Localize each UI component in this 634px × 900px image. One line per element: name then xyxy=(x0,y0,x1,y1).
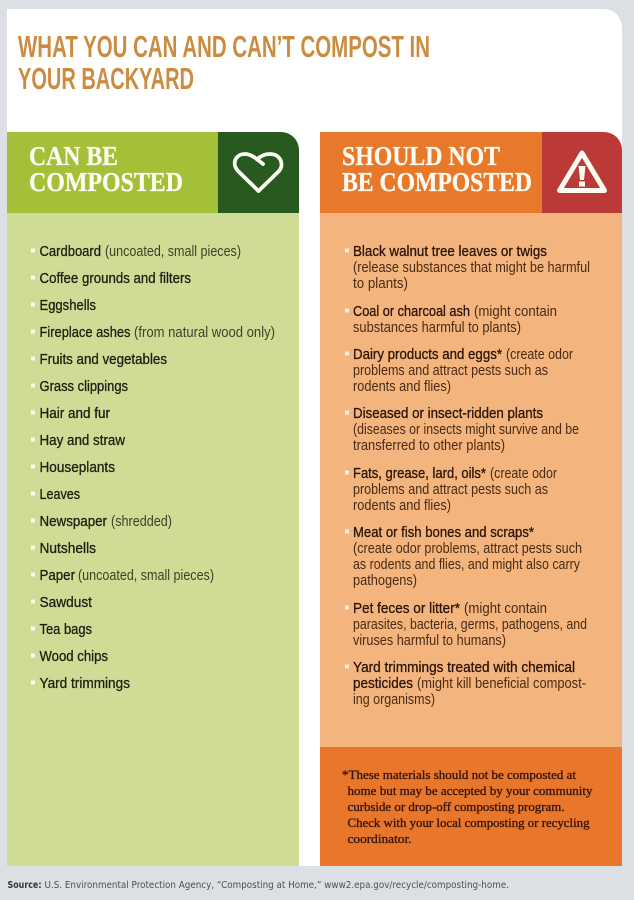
list: items not to compost: Yard trimmings treated with chemical xyxy=(353,659,575,676)
list: compostable items: Fireplace ashes xyxy=(40,324,130,341)
list: compostable items: Wood chips xyxy=(40,648,108,665)
list: compostable items: Tea bags xyxy=(40,621,92,638)
list: items not to compost: to plants) xyxy=(353,275,408,292)
list: items not to compost: (might contain xyxy=(474,303,557,320)
list: compostable items: Nutshells xyxy=(40,540,96,557)
title: YOUR BACKYARD xyxy=(18,61,194,96)
list: items not to compost: transferred to other plants) xyxy=(353,437,505,454)
list: items not to compost: (create odor xyxy=(506,346,573,363)
list: items not to compost: Pet feces or litter* xyxy=(353,600,460,617)
list: items not to compost: parasites, bacteria, germs, pathogens, and xyxy=(353,616,587,633)
list: compostable items: Houseplants xyxy=(40,459,115,476)
list: items not to compost: (diseases or insects might survive and be xyxy=(353,421,579,438)
list: items not to compost: rodents and flies) xyxy=(353,378,451,395)
list: items not to compost: viruses harmful to humans) xyxy=(353,632,506,649)
list: compostable items: Hay and straw xyxy=(40,432,125,449)
callout: footnote: *These materials should not be composted at xyxy=(342,768,577,782)
icon: warning triangle xyxy=(542,132,622,213)
list: items not to compost: (create odor xyxy=(490,465,557,482)
panel body: pale green xyxy=(7,213,299,866)
callout: footnote xyxy=(320,747,622,866)
list: compostable items: (from natural wood only) xyxy=(134,324,275,341)
list: compostable items: Eggshells xyxy=(40,297,96,314)
heading: should not be composted xyxy=(320,132,542,213)
title: WHAT YOU CAN AND CAN’T COMPOST IN xyxy=(18,29,430,64)
callout: footnote: curbside or drop-off composting program. xyxy=(348,800,564,814)
list: items not to compost: Fats, grease, lard, oils* xyxy=(353,465,486,482)
callout: footnote: coordinator. xyxy=(348,832,412,846)
list: compostable items: Hair and fur xyxy=(40,405,110,422)
list: compostable items: (uncoated, small pieces) xyxy=(105,243,241,260)
list: compostable items xyxy=(31,243,275,692)
callout: footnote: Check with your local composting or recycling xyxy=(348,816,590,830)
list: items not to compost: substances harmful to plants) xyxy=(353,319,521,336)
list: items not to compost: as rodents and flies, and might also carry xyxy=(353,556,580,573)
list: compostable items: Cardboard xyxy=(40,243,101,260)
list: compostable items: Yard trimmings xyxy=(40,675,130,692)
heading: can be composted xyxy=(7,132,218,213)
heading: should not be composted: BE COMPOSTED xyxy=(342,167,532,197)
list: items not to compost: pathogens) xyxy=(353,572,417,589)
list: compostable items: Coffee grounds and filters xyxy=(40,270,191,287)
list: compostable items: (uncoated, small pieces) xyxy=(78,567,214,584)
panel: can be composted xyxy=(7,132,299,866)
list: items not to compost: (release substances that might be harmful xyxy=(353,259,590,276)
heading: can be composted: COMPOSTED xyxy=(29,167,183,197)
list: compostable items: Grass clippings xyxy=(40,378,128,395)
panel body: pale orange xyxy=(320,213,622,747)
list: compostable items: (shredded) xyxy=(111,513,172,530)
list: items not to compost xyxy=(345,243,590,708)
list: items not to compost: problems and attract pests such as xyxy=(353,362,548,379)
list: items not to compost: Black walnut tree leaves or twigs xyxy=(353,243,547,260)
heading: should not be composted: SHOULD NOT xyxy=(342,141,500,171)
icon: heart xyxy=(218,132,299,213)
list: items not to compost: (might contain xyxy=(464,600,547,617)
list: items not to compost: Coal or charcoal ash xyxy=(353,303,470,320)
list: items not to compost: ing organisms) xyxy=(353,691,435,708)
list: items not to compost: problems and attract pests such as xyxy=(353,481,548,498)
list: items not to compost: (create odor problems, attract pests such xyxy=(353,540,582,557)
title xyxy=(18,29,430,96)
list: compostable items: Leaves xyxy=(40,486,80,503)
list: compostable items: Paper xyxy=(40,567,75,584)
list: items not to compost: Meat or fish bones and scraps* xyxy=(353,524,534,541)
source line: Source: xyxy=(8,880,42,891)
list: items not to compost: Dairy products and eggs* xyxy=(353,346,502,363)
list: items not to compost: rodents and flies) xyxy=(353,497,451,514)
panel: should not be composted xyxy=(320,132,622,866)
list: items not to compost: (might kill beneficial compost- xyxy=(417,675,586,692)
callout: footnote: home but may be accepted by your community xyxy=(348,784,593,798)
list: compostable items: Fruits and vegetables xyxy=(40,351,167,368)
list: compostable items: Sawdust xyxy=(40,594,93,611)
list: items not to compost: Diseased or insect-ridden plants xyxy=(353,405,543,422)
list: compostable items: Newspaper xyxy=(40,513,107,530)
list: items not to compost: pesticides xyxy=(353,675,413,692)
source line: U.S. Environmental Protection Agency, “Composting at Home,” www2.epa.gov/recycle/composting-home. xyxy=(44,880,509,891)
heading: can be composted: CAN BE xyxy=(29,141,118,171)
